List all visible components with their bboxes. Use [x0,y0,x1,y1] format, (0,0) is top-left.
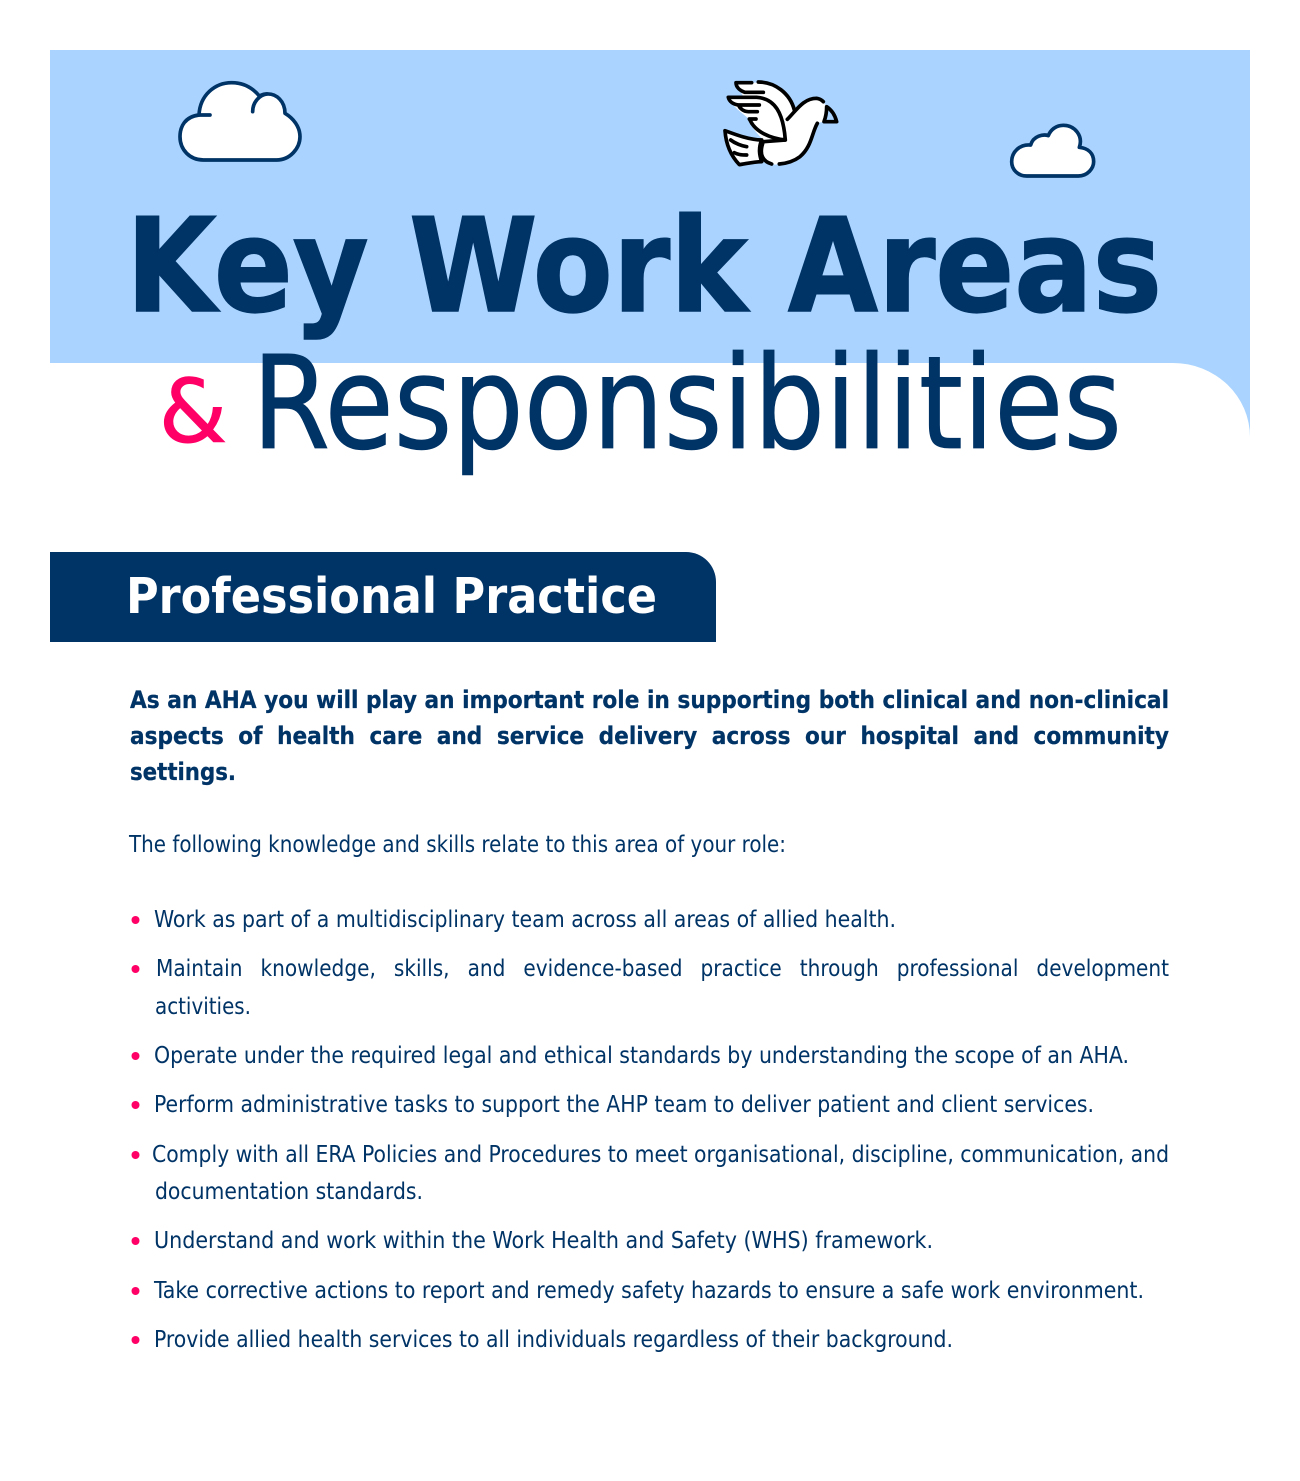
list item 6: Understand and work within the Work Health and Safety (WHS) framework. [154,1228,933,1254]
section heading: Professional Practice [50,552,716,642]
list item 4: Perform administrative tasks to support the AHP team to deliver patient and client services. [154,1092,1094,1118]
bullet list [132,907,1169,1353]
intro paragraph: As an AHA you will play an important role in supporting both clinical and non-clinical [130,686,1169,714]
lead-in sentence: The following knowledge and skills relate to this area of your role: [128,832,786,858]
intro paragraph: aspects of health care and service delivery across our hospital and community [130,722,1169,750]
list item 2 [132,956,1169,1020]
intro paragraph [130,686,1169,786]
list item 5: Comply with all ERA Policies and Procedures to meet organisational, discipline, communication, and [152,1142,1169,1168]
section heading: Professional Practice: Professional Practice [126,568,657,625]
list item 5: documentation standards. [155,1179,423,1205]
title: Key Work Areas: Key Work Areas [126,190,1162,342]
list item 5 [132,1142,1169,1205]
header background panel [50,50,1250,437]
icon: large cloud [180,83,300,160]
list item 1: Work as part of a multidisciplinary team across all areas of allied health. [154,907,896,933]
icon: small cloud [1012,125,1094,176]
list item 2: activities. [155,994,251,1020]
list item 3: Operate under the required legal and ethical standards by understanding the scope of an AHA. [154,1043,1129,1069]
intro paragraph: settings. [130,758,236,786]
title: Responsibilities: Responsibilities [252,329,1122,479]
icon: dove [725,82,837,165]
list item 7: Take corrective actions to report and remedy safety hazards to ensure a safe work environment. [153,1278,1144,1304]
title: ampersand: & [159,361,227,463]
list item 2: Maintain knowledge, skills, and evidence-based practice through professional development [156,956,1169,982]
list item 8: Provide allied health services to all individuals regardless of their background. [154,1327,953,1353]
